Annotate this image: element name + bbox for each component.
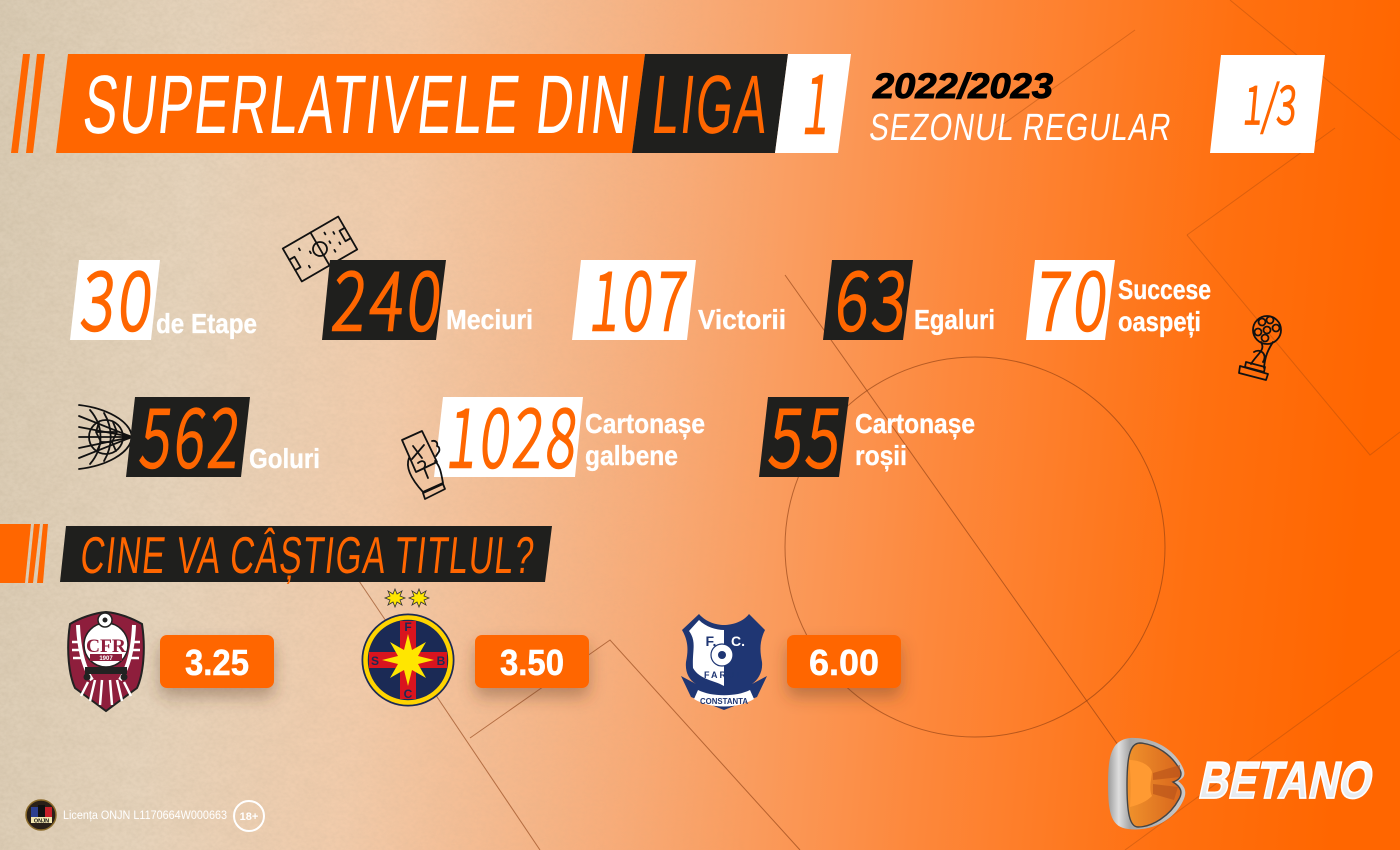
stat: 240 Meciuri: 240: [327, 237, 452, 354]
title banner: LIGA: [648, 58, 774, 151]
stat: 55 Cartonașe roșii: roșii: [855, 440, 907, 471]
odds: FCSB 3.50: 3.50: [500, 642, 564, 683]
title banner: 1: [798, 40, 837, 157]
stat: 240 Meciuri: Meciuri: [446, 304, 533, 335]
logo: FCSB: S: [371, 654, 379, 668]
stat: 1028 Cartonașe galbene: 1028: [442, 374, 587, 491]
logo: Farul Constanța: CONSTANTA: [700, 697, 748, 706]
season label: 2022/2023: [872, 67, 1054, 106]
logo: FCSB: [362, 589, 454, 706]
two stars: [385, 589, 429, 607]
stat: 562 Goluri: Goluri: [249, 443, 320, 474]
stat: 562 Goluri: 562: [135, 374, 250, 491]
ONJN badge: [26, 800, 56, 830]
stat: 30 de Etape: 30: [76, 237, 163, 354]
stat: 55 Cartonașe roșii: [759, 374, 975, 491]
logo: CFR Cluj: CFR: [86, 636, 126, 657]
stat: 63 Egaluri: Egaluri: [914, 304, 995, 335]
stat: 70 Succese oaspeți: [1026, 237, 1211, 354]
logo: Farul Constanța: F.: [706, 633, 716, 649]
icon: football pitch: [283, 217, 357, 281]
logo: FCSB: F: [404, 620, 412, 634]
page number 1/3: 1/3: [1241, 63, 1300, 140]
odds: CFR 3.25: [160, 635, 274, 688]
stat: 1028 Cartonașe galbene: Cartonașe: [585, 408, 705, 439]
page number 1/3: [1210, 55, 1325, 153]
stat: 30 de Etape: de Etape: [156, 308, 257, 339]
stat: 70 Succese oaspeți: oaspeți: [1118, 306, 1201, 337]
licence footer: Licența ONJN L1170664W000663: [63, 810, 227, 822]
stat: 70 Succese oaspeți: Succese: [1118, 274, 1211, 305]
ONJN badge: ONJN: [34, 818, 49, 824]
stat: 107 Victorii: Victorii: [698, 304, 786, 335]
odds: Farul 6.00: 6.00: [809, 642, 879, 683]
title banner: [11, 40, 851, 157]
stat: 63 Egaluri: [823, 237, 995, 354]
stat: 55 Cartonașe roșii: Cartonașe: [855, 408, 975, 439]
icon: trophy: [1239, 316, 1281, 380]
heading: Cine va câștiga titlul: [0, 524, 552, 585]
logo: Farul Constanța: [681, 614, 767, 710]
licence footer: [26, 800, 264, 831]
logo: Farul Constanța: FARUL: [704, 670, 742, 680]
logo: Betano: [1108, 738, 1379, 829]
stat: 70 Succese oaspeți: 70: [1031, 237, 1118, 354]
logo: FCSB: C: [404, 687, 413, 701]
licence footer: 18+: [240, 811, 258, 823]
logo: Farul Constanța: C.: [731, 633, 745, 649]
odds: FCSB 3.50: [475, 635, 589, 688]
stat: 30 de Etape: [70, 237, 257, 354]
season label: [867, 67, 1175, 149]
heading: Cine va câștiga titlul: CINE VA CÂȘTIGA TITLUL?: [78, 527, 538, 585]
logo: FCSB: B: [437, 654, 446, 668]
logo: CFR Cluj: 1907: [99, 656, 113, 662]
icon: hand holding card: [402, 431, 445, 499]
odds: CFR 3.25: 3.25: [185, 642, 249, 683]
stat: 107 Victorii: 107: [585, 237, 696, 354]
stat: 55 Cartonașe roșii: 55: [764, 374, 851, 491]
season label: SEZONUL REGULAR: [867, 106, 1175, 149]
football pitch lines: [355, 0, 1400, 850]
icon: ball in net: [79, 405, 132, 469]
stat: 1028 Cartonașe galbene: galbene: [585, 440, 678, 471]
odds: Farul 6.00: [787, 635, 901, 688]
title banner: SUPERLATIVELE DIN: [79, 58, 636, 151]
stat: 63 Egaluri: 63: [830, 237, 917, 354]
logo: CFR Cluj: [68, 612, 144, 711]
